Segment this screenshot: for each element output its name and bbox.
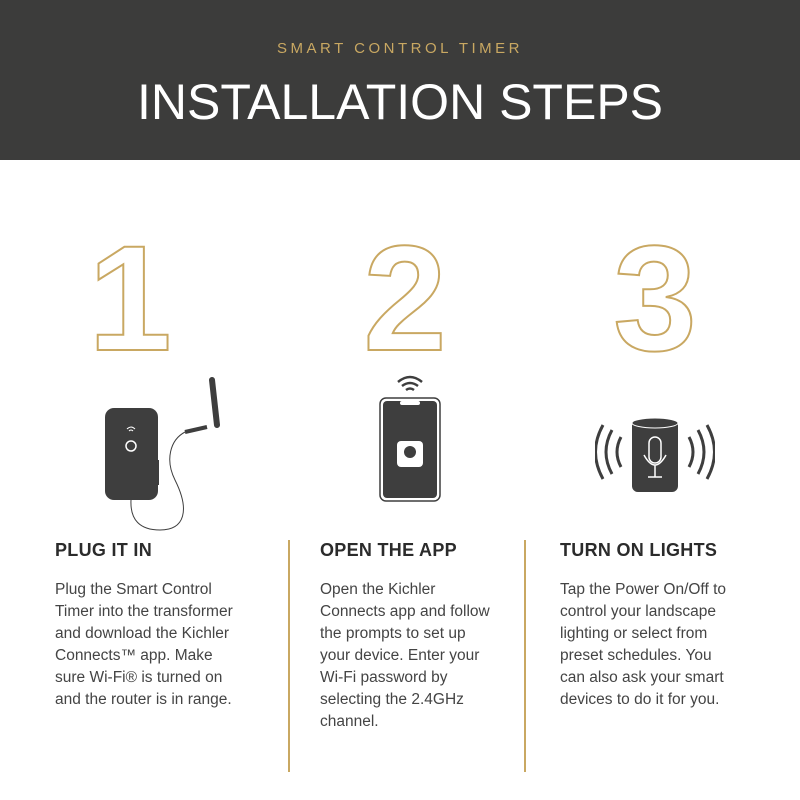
text: step 2: channel. bbox=[320, 713, 379, 730]
heading: plug it in: PLUG IT IN bbox=[55, 540, 152, 560]
text: step 1: sure Wi-Fi® is turned on bbox=[55, 669, 222, 686]
heading: turn on lights: TURN ON LIGHTS bbox=[560, 540, 717, 560]
text: step 2: your device. Enter your bbox=[320, 647, 479, 664]
text: step 2 bbox=[320, 581, 490, 730]
step numbers bbox=[88, 220, 697, 360]
text: step 1: Plug the Smart Control bbox=[55, 581, 212, 598]
icon: smartphone bbox=[379, 376, 441, 502]
text: step 1: and download the Kichler bbox=[55, 625, 229, 642]
text: step 1: Connects™ app. Make bbox=[55, 647, 213, 664]
text: step 2: Open the Kichler bbox=[320, 581, 435, 598]
text: step 1 bbox=[55, 581, 233, 708]
header banner bbox=[0, 0, 800, 160]
text: step 3 bbox=[560, 581, 726, 708]
subtitle: SMART CONTROL TIMER bbox=[277, 40, 523, 57]
text: step 3: control your landscape bbox=[560, 603, 716, 620]
text: step 3: devices to do it for you. bbox=[560, 691, 719, 708]
text: step 2: Connects app and follow bbox=[320, 603, 490, 620]
heading: open the app: OPEN THE APP bbox=[320, 540, 457, 560]
title: INSTALLATION STEPS bbox=[137, 74, 663, 130]
icon: timer device bbox=[105, 377, 220, 530]
text: step 3: lighting or select from bbox=[560, 625, 707, 642]
text: step 3: preset schedules. You bbox=[560, 647, 712, 664]
text: step 2: selecting the 2.4GHz bbox=[320, 691, 464, 708]
text: step 1: Timer into the transformer bbox=[55, 603, 233, 620]
text: step 3: can also ask your smart bbox=[560, 669, 724, 686]
icon: smart speaker bbox=[595, 418, 715, 492]
text: step 2: Wi-Fi password by bbox=[320, 669, 447, 686]
text: step 3: Tap the Power On/Off to bbox=[560, 581, 726, 598]
text: step 1: and the router is in range. bbox=[55, 691, 232, 708]
text: step 2: the prompts to set up bbox=[320, 625, 466, 642]
